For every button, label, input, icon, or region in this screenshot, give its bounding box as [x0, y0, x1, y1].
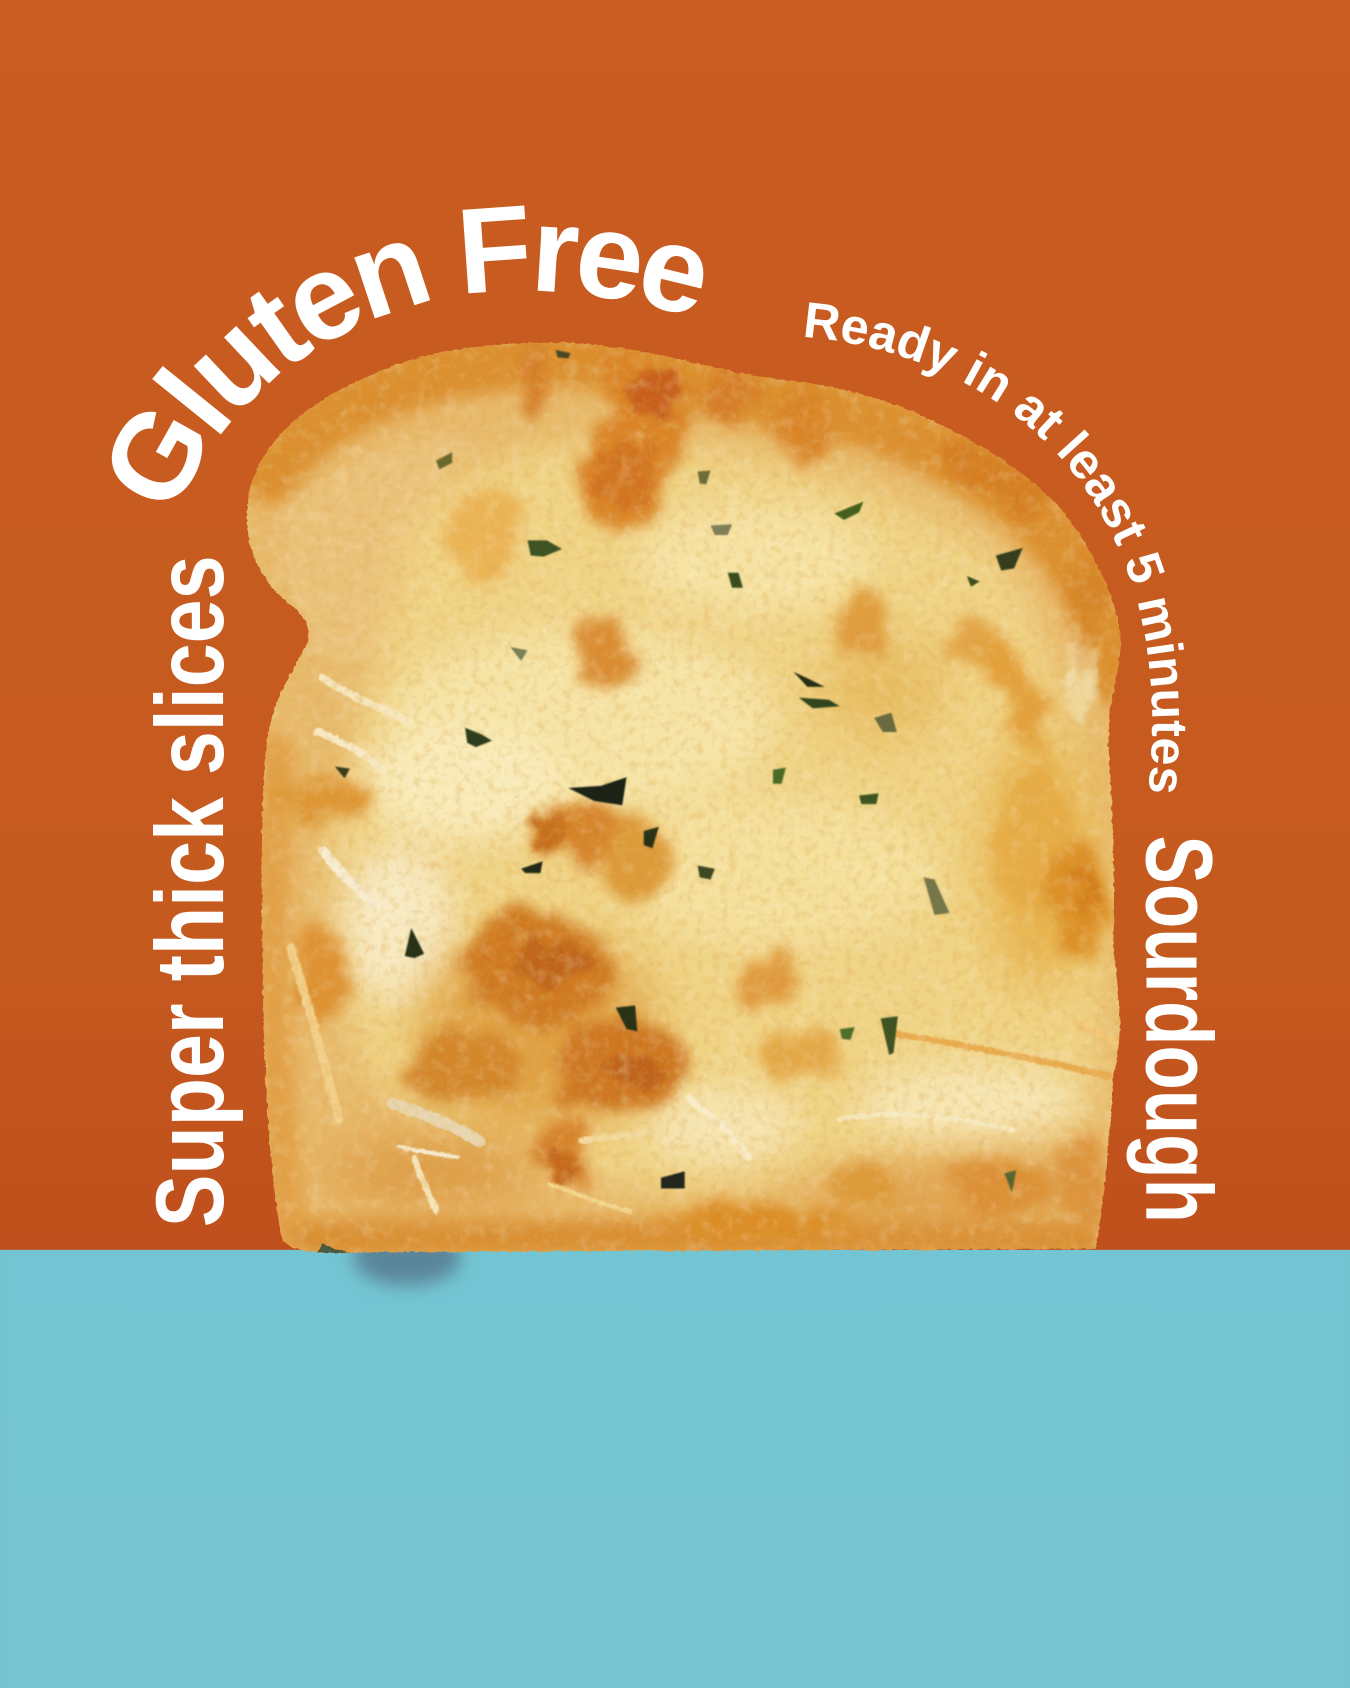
herb flecks [335, 350, 1023, 1193]
toast slice [215, 323, 1152, 1270]
cheese shreds [291, 678, 1122, 1211]
golden mid-tone shadows [323, 635, 1098, 1224]
cheese highlights [247, 342, 1120, 1253]
vertical label: Super thick slices: Super thick slices [135, 555, 244, 1227]
vertical label: Sourdough: Sourdough [1126, 835, 1232, 1223]
curved label: Ready in at least 5 minutes: Ready in at least 5 minutes [805, 302, 1186, 792]
browned cheese patches [282, 341, 1110, 1237]
toast shadow on counter [353, 1229, 461, 1285]
crust golden edges [269, 357, 1109, 1238]
melted cheese main mass [329, 442, 1104, 1195]
orange background [0, 0, 1350, 1251]
crust base shade [318, 1244, 351, 1254]
curved label: Gluten Free: Gluten Free [112, 206, 704, 500]
bread base [215, 323, 1152, 1270]
deepest toasted spots [510, 369, 1100, 1187]
exposed crumb upper left [280, 436, 1097, 727]
crumb texture [252, 344, 1117, 1246]
blue counter surface [0, 1250, 1350, 1688]
